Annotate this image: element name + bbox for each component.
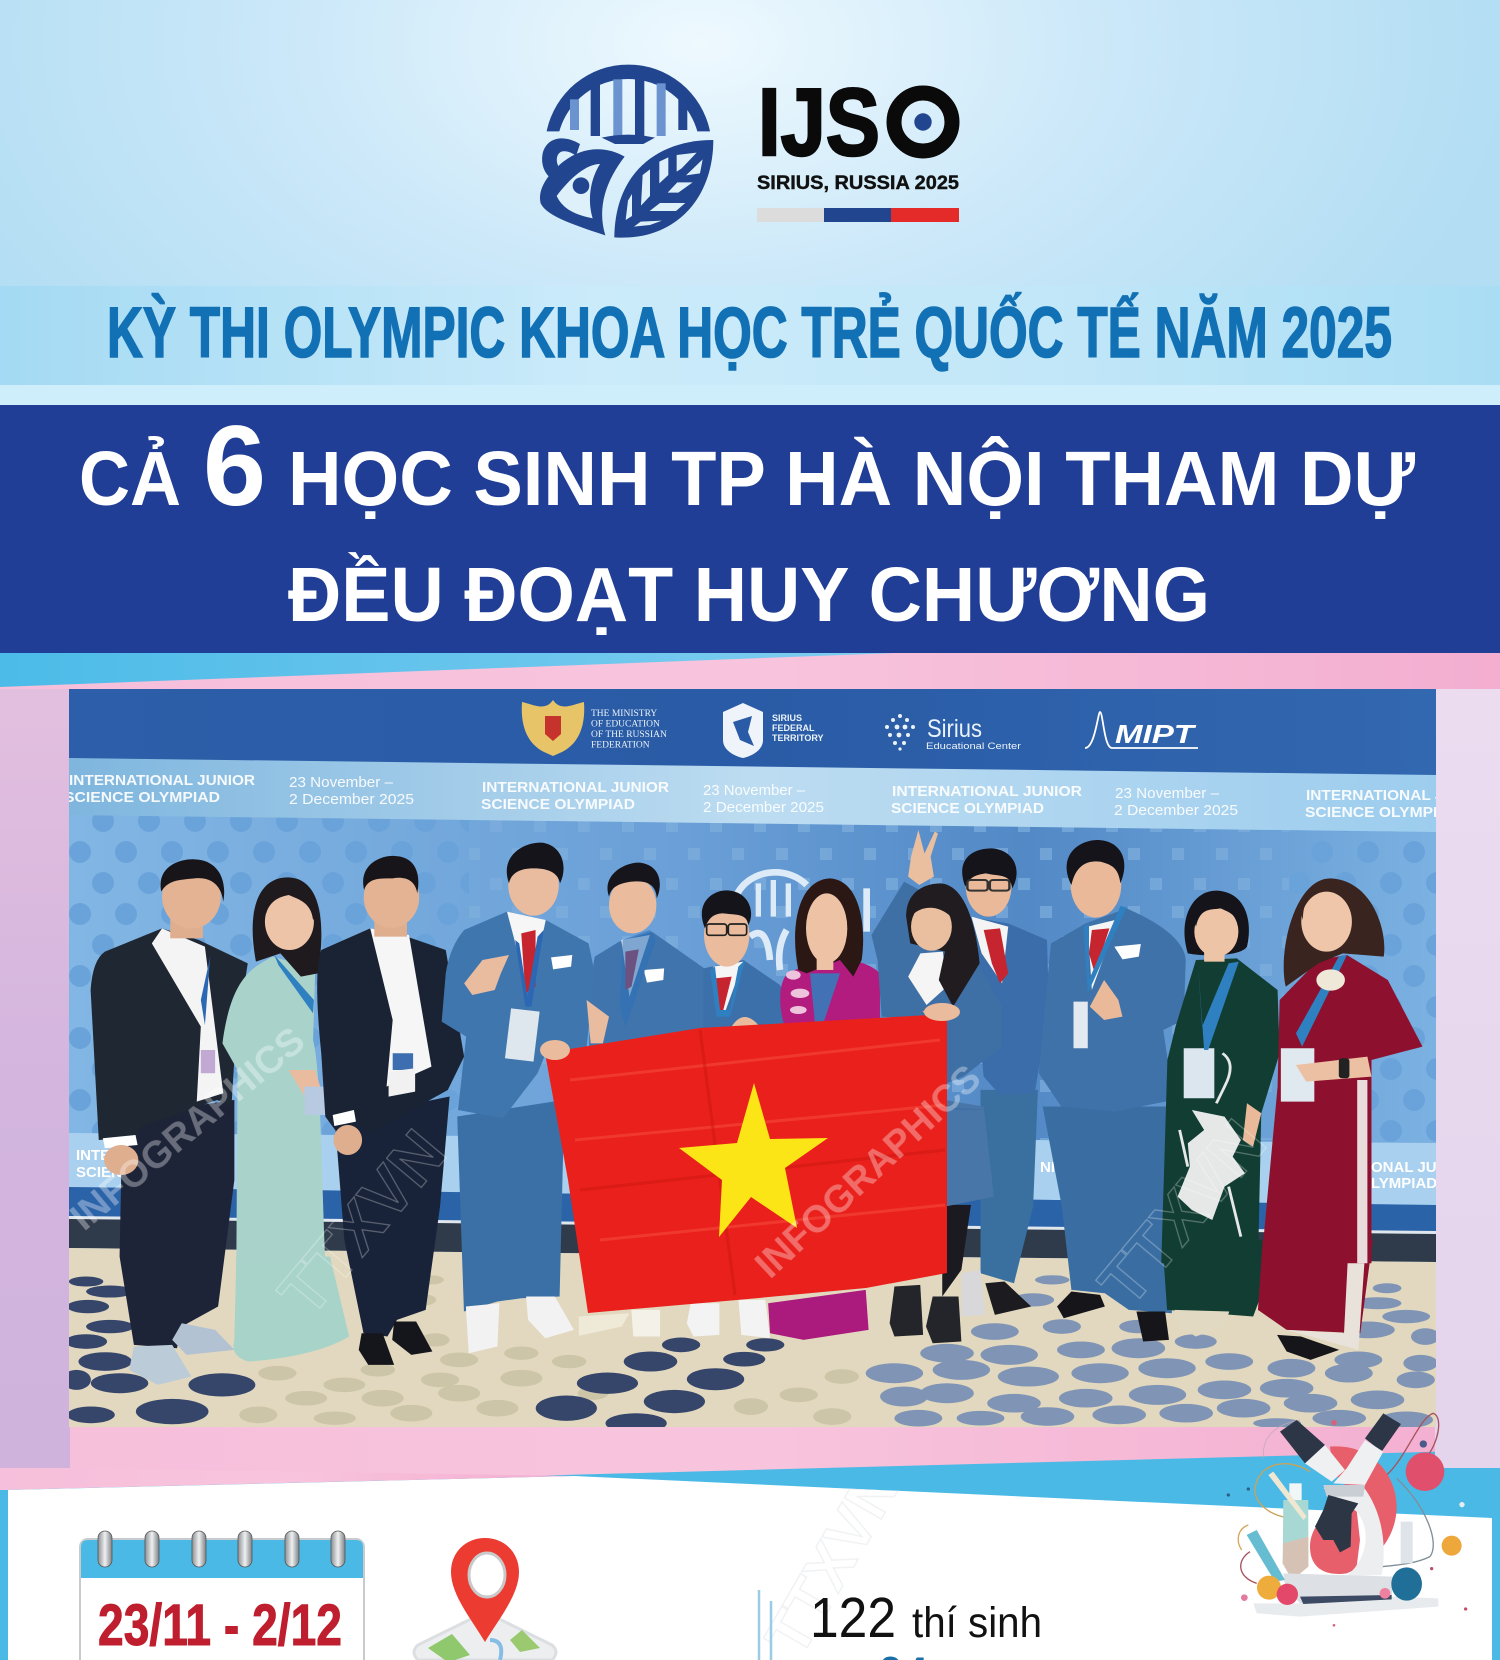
blue-grey dots [866, 1275, 1440, 1428]
test tube large [1283, 1500, 1308, 1575]
lower wall strip and stage: ONAL JUN [1371, 1159, 1447, 1176]
watermarks: INFOGRAPHICS [63, 1019, 313, 1239]
logo: Sirius Educational Center: Educational Center [926, 741, 1021, 752]
wall logo behind team [737, 872, 870, 970]
lower wall strip and stage: INTE [76, 1147, 110, 1164]
headline line 1: HỌC SINH TP HÀ NỘI THAM DỰ [288, 435, 1415, 522]
man 1 legs and shoes [120, 1100, 234, 1385]
pink band edge over panel [0, 1468, 574, 1490]
strip text repeated: 2 December 2025 [1114, 802, 1238, 819]
russian flag stripe [757, 208, 959, 222]
logo: Sirius Federal Territory [723, 703, 824, 758]
logo: Sirius Federal Territory: SIRIUS [772, 713, 802, 723]
strip text repeated: 23 November – [289, 774, 394, 791]
white content panel [8, 1476, 1492, 1660]
wires [1238, 1413, 1439, 1583]
headline line 1 [79, 403, 1415, 530]
calendar icon [80, 1531, 364, 1660]
person 4: student with hand sign [442, 843, 609, 1118]
strip text repeated: SCIENCE OLYMPIAD [891, 800, 1044, 817]
objectives [1315, 1495, 1358, 1552]
girl 8 legs and shoes [890, 1205, 971, 1343]
logo: Sirius Educational Center: Sirius [927, 715, 982, 743]
beige dots [239, 1269, 859, 1425]
carpet floor [62, 1248, 1440, 1433]
headline line 2: ĐỀU ĐOẠT HUY CHƯƠNG [288, 551, 1210, 638]
icon: flag star [679, 1083, 828, 1237]
logo: MIPT [1085, 712, 1198, 749]
backdrop dots [69, 815, 1436, 1145]
student 9 legs and shoes [961, 1090, 1038, 1317]
strip text repeated: INTERNATIONAL JUNIOR [482, 779, 669, 796]
person 7: teacher in magenta [780, 878, 880, 1030]
microscope arm [1323, 1487, 1384, 1576]
teacher 11 hem [1164, 1240, 1263, 1336]
person 5: student [589, 863, 711, 1053]
strip text repeated: SCIENCE OLYMPIAD [64, 789, 220, 806]
olympiad strip [69, 758, 1436, 832]
watermarks [63, 1019, 989, 1287]
person 3: man in navy suit [317, 856, 464, 1155]
person 9: student behind [962, 848, 1049, 1095]
woman 2 skirt [233, 1257, 349, 1362]
teacher 12 hem [1258, 1240, 1373, 1360]
logo: MIPT: MIPT [1115, 719, 1197, 749]
student 4 legs and shoes [457, 1100, 574, 1353]
lower section blue background [0, 1448, 1500, 1660]
strip text repeated [69, 775, 1436, 817]
band under ribbon [0, 385, 1500, 405]
strip text repeated: INTERNATIONAL JUNIOR [892, 783, 1082, 800]
logo: ministry eagle: OF THE RUSSIAN [591, 730, 667, 740]
man 3 legs and shoes [335, 1097, 450, 1365]
person 6: student with glasses [702, 890, 789, 1033]
strip text repeated: INTERNATIONAL JUNIOR [69, 772, 255, 789]
spheres [1406, 1452, 1444, 1491]
statistic: 122 contestants: thí sinh [912, 1599, 1042, 1647]
pink swirl [1310, 1446, 1397, 1574]
dark blue sponsor banner [69, 689, 1436, 776]
navy dots [62, 1277, 784, 1433]
strip text repeated: SCIENCE OLYMPIAD [1305, 804, 1460, 821]
person 1: man in black suit [91, 859, 248, 1175]
logo: ministry eagle: THE MINISTRY [591, 709, 657, 719]
logo: Sirius Federal Territory: TERRITORY [772, 733, 824, 743]
flower embroidery [1178, 1110, 1245, 1220]
Vietnamese flag [545, 1014, 947, 1313]
legs and shoes [120, 1090, 1373, 1385]
pink band above photo [0, 653, 1500, 690]
team photo illustration: TTXVN [264, 1116, 460, 1329]
strip text repeated: 2 December 2025 [703, 799, 824, 816]
microscope illustration [1227, 1413, 1467, 1627]
small test tube [1247, 1530, 1285, 1582]
statistic: 122 contestants [810, 1586, 1042, 1650]
logo: ministry eagle: OF EDUCATION [591, 720, 660, 730]
person 8: girl student with V sign [871, 830, 1002, 1207]
strip text repeated: 23 November – [703, 782, 806, 799]
blue wedge above photo [0, 653, 895, 687]
wordmark IJSO: IJS [758, 69, 880, 176]
team photo illustration: TTXVN [1084, 1106, 1280, 1319]
watermarks: INFOGRAPHICS [747, 1057, 989, 1287]
student 10 legs and shoes [1043, 1107, 1177, 1342]
eyepieces [1280, 1420, 1325, 1463]
logo: Sirius Educational Center [885, 714, 1021, 752]
other shoes under flag [579, 1290, 869, 1340]
headline line 1: 6 [203, 403, 266, 530]
pink band below photo [0, 1425, 1500, 1490]
location pin and map icon [414, 1538, 556, 1660]
base [1253, 1597, 1438, 1617]
person 2: woman in teal ao dai [222, 877, 325, 1263]
logo: Sirius Federal Territory: FEDERAL [772, 723, 815, 733]
person 11: teacher in green ao dai [1161, 891, 1280, 1263]
team photo illustration [62, 689, 1493, 1433]
hands on flag [540, 1003, 960, 1060]
IJSO logo [540, 65, 959, 238]
participants divider lines [759, 1590, 771, 1660]
headline banner [0, 403, 1500, 653]
left lilac side panel [0, 689, 70, 1468]
icon: dome, fish and leaf emblem [540, 65, 713, 238]
subtitle Sirius Russia 2025: SIRIUS, RUSSIA 2025 [757, 173, 959, 194]
strip text repeated: 23 November – [1115, 785, 1220, 802]
statistic: 122 contestants: 122 [810, 1586, 896, 1650]
lower wall strip and stage: SCIEN [76, 1164, 122, 1181]
strip text repeated: 2 December 2025 [289, 791, 414, 808]
header background [0, 0, 1500, 420]
person 10: student with thumbs up [1039, 840, 1186, 1112]
headline line 1: CẢ [79, 435, 181, 522]
lower wall strip and stage: LYMPIAD [1371, 1175, 1437, 1192]
logo: ministry eagle: FEDERATION [591, 740, 650, 750]
lower wall strip and stage: NIO [1040, 1159, 1067, 1176]
lower wall strip and stage [69, 1133, 1447, 1262]
date range: 23/11 - 2/12 [98, 1593, 342, 1658]
flask [1401, 1522, 1413, 1563]
strip text repeated: INTERNATIONAL JUNIOR [1306, 787, 1493, 804]
right lilac side panel [1435, 689, 1500, 1468]
logo: ministry eagle [522, 700, 667, 756]
title ribbon background [0, 286, 1500, 385]
strip text repeated: SCIENCE OLYMPIAD [481, 796, 635, 813]
sponsor logos [522, 700, 1198, 758]
person 12: teacher in red ao dai [1261, 878, 1423, 1263]
calendar rings [98, 1531, 345, 1567]
